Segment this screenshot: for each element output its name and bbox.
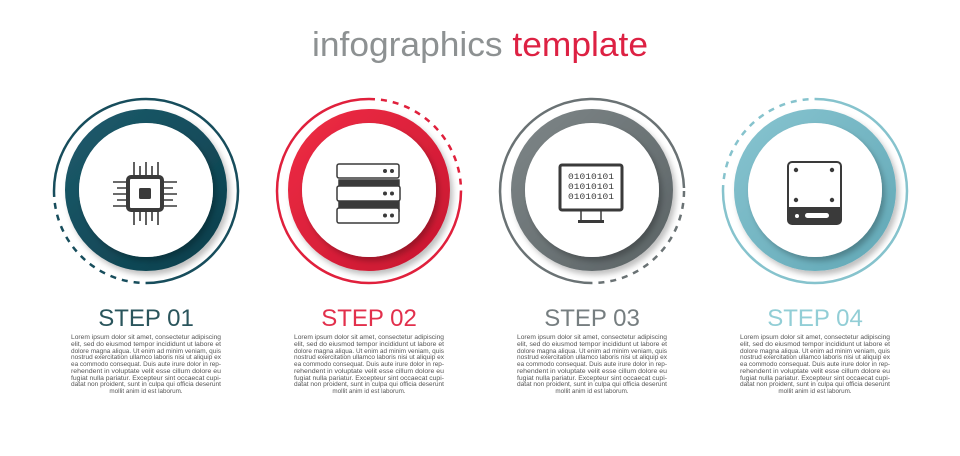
text: step 02: elit, sed do eiusmod tempor incididunt ut labore et [294,341,444,348]
text: step 01: ea commodo consequat. Duis aute irure dolor in rep- [71,361,221,368]
text: step 01: Lorem ipsum dolor sit amet, consectetur adipiscing [71,334,222,341]
text: step 04: ea commodo consequat. Duis aute irure dolor in rep- [740,361,890,368]
icon: chip [113,162,177,225]
text: step 04: elit, sed do eiusmod tempor incididunt ut labore et [740,341,890,348]
text: step 04: mollit anim id est laborum. [778,388,852,395]
text: step 01: elit, sed do eiusmod tempor incididunt ut labore et [71,341,221,348]
panel: step 02 [277,99,461,395]
text: step 03: elit, sed do eiusmod tempor incididunt ut labore et [517,341,667,348]
text: step 03: nostrud exercitation ullamco laboris nisi ut aliquip ex [517,354,668,361]
heading: step 03: STEP 03 [544,305,640,332]
heading: step 01: STEP 01 [98,305,194,332]
text: step 03: Lorem ipsum dolor sit amet, consectetur adipiscing [517,334,668,341]
text: step 02: fugiat nulla pariatur. Excepteur sint occaecat cupi- [294,375,444,382]
text: step 04 [740,334,891,395]
ring: step 02 [277,99,461,283]
panel: step 03 [500,99,684,395]
icon: monitor: 01010101 [568,193,614,202]
panel: step 01 [54,99,238,395]
text: step 03: mollit anim id est laborum. [555,388,629,395]
heading: step 04: STEP 04 [767,305,863,332]
text: step 01 [71,334,222,395]
ring: step 04 [723,99,907,283]
text: step 04: datat non proident, sunt in culpa qui officia deserunt [740,381,890,388]
text: step 01: datat non proident, sunt in culpa qui officia deserunt [71,381,221,388]
icon: monitor: 01010101 [568,183,614,192]
text: step 03 [517,334,668,395]
text: step 03: ea commodo consequat. Duis aute irure dolor in rep- [517,361,667,368]
text: step 01: mollit anim id est laborum. [109,388,183,395]
panel: step 04 [723,99,907,395]
icon: monitor: 01010101 [568,173,614,182]
text: step 02: Lorem ipsum dolor sit amet, consectetur adipiscing [294,334,445,341]
icon: monitor [560,165,622,223]
text: step 04: Lorem ipsum dolor sit amet, consectetur adipiscing [740,334,891,341]
text: step 04: nostrud exercitation ullamco laboris nisi ut aliquip ex [740,354,891,361]
text: step 02: ea commodo consequat. Duis aute irure dolor in rep- [294,361,444,368]
ring: step 03 [500,99,684,283]
text: step 01: nostrud exercitation ullamco laboris nisi ut aliquip ex [71,354,222,361]
text: step 01: dolore magna aliqua. Ut enim ad minim veniam, quis [71,348,221,355]
text: step 04: fugiat nulla pariatur. Excepteur sint occaecat cupi- [740,375,890,382]
text: step 02: nostrud exercitation ullamco laboris nisi ut aliquip ex [294,354,445,361]
text: step 02: rehendent in voluptate velit esse cillum dolore eu [294,368,445,375]
text: step 03: fugiat nulla pariatur. Excepteur sint occaecat cupi- [517,375,667,382]
text: step 03: dolore magna aliqua. Ut enim ad minim veniam, quis [517,348,667,355]
text: step 04: dolore magna aliqua. Ut enim ad minim veniam, quis [740,348,890,355]
text: step 02: datat non proident, sunt in culpa qui officia deserunt [294,381,444,388]
ring: step 01 [54,99,238,283]
text: step 02: mollit anim id est laborum. [332,388,406,395]
icon: hard drive [788,162,841,224]
text: step 01: rehendent in voluptate velit esse cillum dolore eu [71,368,222,375]
icon: server [337,164,400,223]
text: step 02: dolore magna aliqua. Ut enim ad minim veniam, quis [294,348,444,355]
text: step 02 [294,334,445,395]
text: step 03: datat non proident, sunt in culpa qui officia deserunt [517,381,667,388]
text: step 01: fugiat nulla pariatur. Excepteur sint occaecat cupi- [71,375,221,382]
text: step 04: rehendent in voluptate velit esse cillum dolore eu [740,368,891,375]
heading: step 02: STEP 02 [321,305,417,332]
title: infographics template [312,26,648,64]
text: step 03: rehendent in voluptate velit esse cillum dolore eu [517,368,668,375]
